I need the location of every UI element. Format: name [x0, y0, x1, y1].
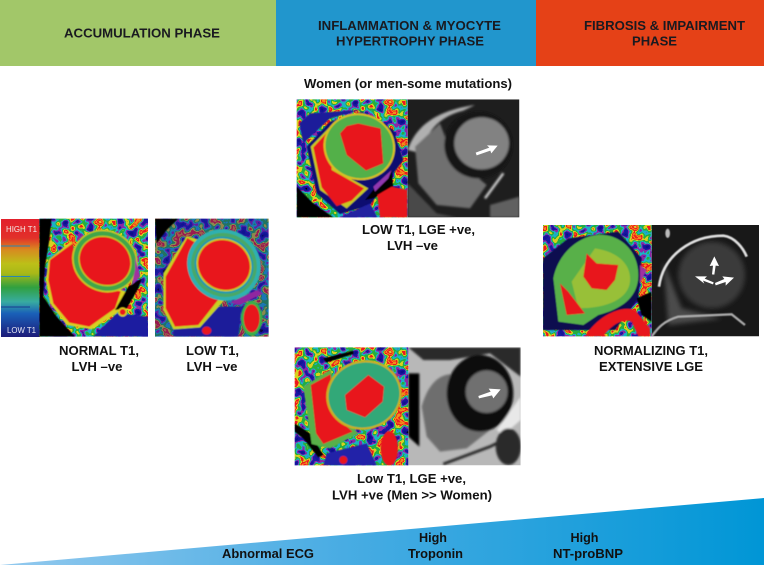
heading: women or men with some mutations: Women (or men-some mutations) — [304, 77, 512, 91]
caption: low T1 LVH negative: LOW T1, — [186, 344, 239, 358]
LGE image with arrow: women — [408, 99, 519, 217]
arrows: fibrosis LGE — [695, 256, 734, 286]
arrow: women LGE — [476, 145, 498, 155]
caption: low T1 LVH negative: LVH –ve — [186, 360, 238, 374]
caption: normal T1 LVH negative: LVH –ve — [72, 360, 123, 374]
label: high troponin: High — [419, 531, 447, 545]
header: accumulation phase: ACCUMULATION PHASE — [64, 25, 220, 40]
header: inflammation and myocyte hypertrophy phase: INFLAMMATION & MYOCYTE — [318, 18, 501, 33]
caption: low T1 LGE positive LVH positive: LVH +ve (Men >> Women) — [332, 488, 492, 502]
caption: low T1 LGE positive LVH positive — [332, 472, 492, 502]
arrow: men LGE — [478, 389, 501, 398]
LGE image with arrows: fibrosis — [652, 225, 759, 336]
caption: low T1 LGE positive LVH negative: LVH –ve — [387, 239, 438, 253]
caption: low T1 LGE positive LVH negative — [362, 223, 475, 253]
header: fibrosis and impairment phase — [536, 0, 764, 66]
label: high NT-proBNP: High — [570, 531, 598, 545]
label: high troponin: Troponin — [408, 547, 463, 561]
caption: normalizing T1 extensive LGE — [594, 344, 708, 374]
caption: normalizing T1 extensive LGE: EXTENSIVE LGE — [599, 360, 703, 374]
label: high NT-proBNP: NT-proBNP — [553, 547, 623, 561]
T1 map: normal T1 — [39, 218, 149, 337]
LGE image with arrow: men — [408, 347, 521, 465]
T1 map: low T1 — [155, 216, 274, 337]
T1 and LGE pair: fibrosis — [543, 225, 652, 336]
caption: normal T1 LVH negative: NORMAL T1, — [59, 344, 139, 358]
header: inflammation and myocyte hypertrophy phase — [276, 0, 536, 66]
label: high NT-proBNP — [553, 531, 623, 561]
header: inflammation and myocyte hypertrophy phase: HYPERTROPHY PHASE — [336, 34, 484, 48]
T1 and LGE pair: women — [297, 99, 408, 217]
caption: low T1 LGE positive LVH negative: LOW T1, LGE +ve, — [362, 223, 475, 237]
caption: low T1 LVH negative — [186, 344, 239, 374]
T1 colour scale: HIGH T1 — [6, 224, 37, 234]
caption: normal T1 LVH negative — [59, 344, 139, 374]
label: high troponin — [408, 531, 463, 561]
biomarker wedge — [0, 498, 764, 565]
T1 colour scale: LOW T1 — [7, 325, 36, 335]
caption: low T1 LGE positive LVH positive: Low T1, LGE +ve, — [357, 472, 466, 486]
T1 and LGE pair: men — [295, 347, 410, 466]
caption: normalizing T1 extensive LGE: NORMALIZING T1, — [594, 344, 708, 358]
header: fibrosis and impairment phase: FIBROSIS & IMPAIRMENT — [584, 18, 745, 33]
label: abnormal ECG: Abnormal ECG — [222, 547, 314, 561]
header: accumulation phase — [0, 0, 276, 66]
T1 colour scale — [1, 219, 40, 337]
header: fibrosis and impairment phase: PHASE — [632, 34, 677, 48]
